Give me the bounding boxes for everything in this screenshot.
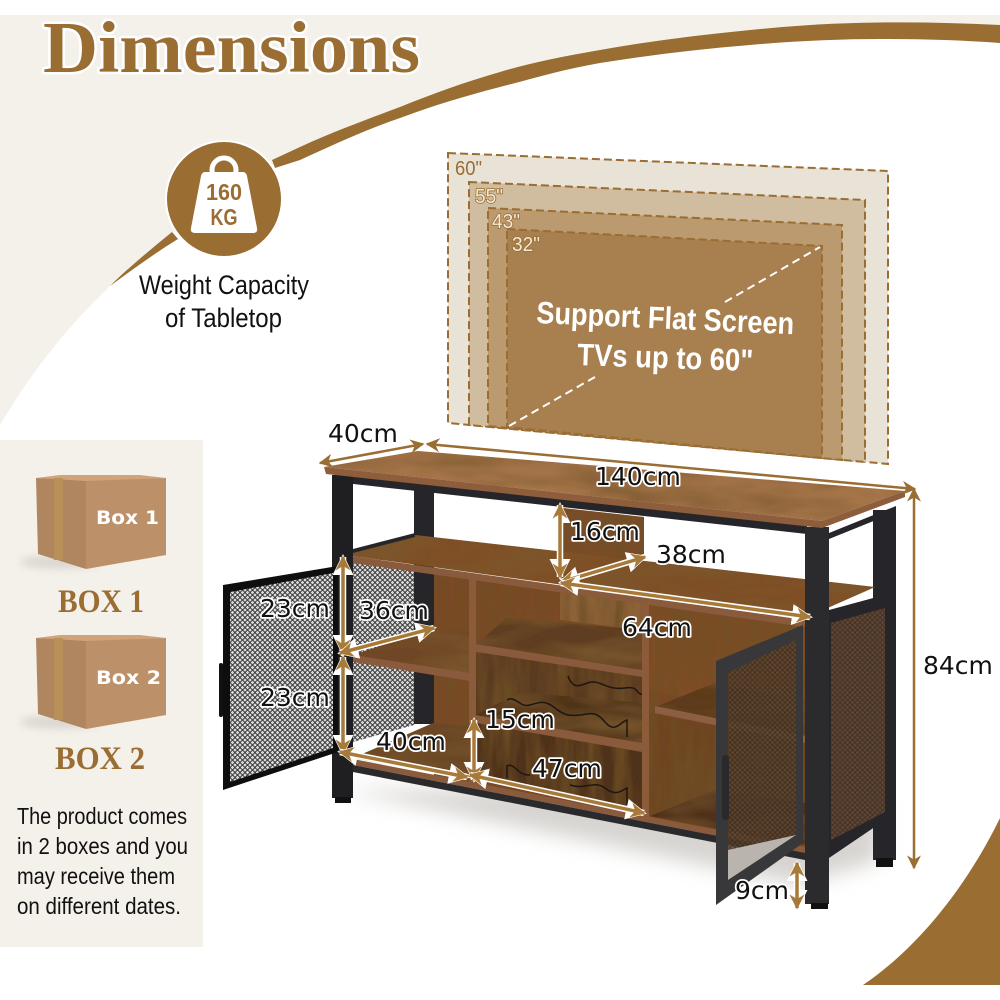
left door handle: [219, 663, 223, 717]
interior back wall: [434, 570, 805, 855]
left shelf: [353, 628, 470, 681]
55 inch screen: [469, 182, 865, 462]
title: Dimensions: [43, 7, 420, 88]
label: 140cm: 140cm: [595, 462, 681, 491]
back legs: [414, 484, 896, 867]
label: 9cm: 9cm: [735, 876, 789, 905]
text: shipping note: The product comes: [17, 803, 187, 829]
icon: box 1: Box 1: [96, 508, 159, 529]
TV support text: Support Flat Screen: [536, 295, 795, 341]
arrow: 64cm: [561, 583, 810, 617]
label: 84cm: 84cm: [923, 651, 993, 680]
wine racks: [507, 676, 642, 805]
left door: [219, 566, 338, 790]
arrow: 23cm upper: [340, 557, 346, 653]
tabletop: [324, 451, 905, 528]
arrow: 9cm: [794, 863, 800, 908]
screen diagonal: [509, 247, 820, 426]
right door handle: [722, 755, 729, 820]
open shelf: [345, 533, 875, 627]
text: weight capacity caption: Weight Capacity: [139, 270, 309, 300]
TV support text: TVs up to 60": [577, 337, 754, 378]
size labels: 55": [475, 186, 503, 208]
label: 40cm shelf: 40cm: [376, 727, 446, 756]
background: beige curved area: [0, 15, 1000, 425]
panel: boxes: [0, 440, 203, 947]
floor shadow: [340, 790, 880, 885]
text: shipping note: may receive them: [17, 863, 175, 889]
front right leg: [805, 527, 829, 909]
TV support text: [536, 295, 795, 378]
right compartment: [649, 602, 805, 845]
arrow: 36cm: [340, 628, 434, 653]
bottom shelf: [353, 723, 805, 860]
size labels: 32": [512, 234, 540, 256]
text: shipping note: [17, 803, 188, 919]
label: 36cm: 36cm: [359, 596, 429, 625]
label: 16cm: 16cm: [570, 517, 640, 546]
left compartment mesh end panel: [353, 560, 414, 742]
arrow: table width 140cm: [427, 444, 915, 489]
decorative corner swoosh: [863, 818, 1000, 985]
label: 23cm upper: 23cm: [260, 594, 330, 623]
icon: weight badge: [165, 140, 283, 258]
arrow: 40cm shelf: [340, 752, 467, 777]
43 inch screen: [488, 208, 842, 460]
label: BOX 1: BOX 1: [58, 584, 144, 620]
icon: box 2: Box 2: [96, 668, 161, 689]
back post: [563, 508, 644, 585]
size labels: [455, 158, 540, 256]
upper rail: [335, 473, 807, 534]
icon: weight shape: [191, 158, 257, 233]
middle shelves: [475, 618, 642, 816]
icon: weight shape: 160: [206, 179, 242, 205]
label: 40cm depth: 40cm: [328, 419, 398, 448]
lighter recess at rear of upper compartment: [560, 590, 642, 630]
label: 23cm lower: 23cm: [260, 683, 330, 712]
icon: weight shape: KG: [210, 204, 238, 230]
arrow: height 84cm: [913, 489, 915, 868]
label: 47cm: 47cm: [532, 754, 602, 783]
32 inch screen: [507, 229, 822, 458]
text: shipping note: in 2 boxes and you: [17, 833, 188, 859]
right side panel: [829, 594, 888, 858]
TV size stack: [448, 153, 888, 464]
dividers: [469, 576, 649, 818]
label: BOX 2: BOX 2: [55, 741, 145, 777]
brown swoosh curve: [110, 22, 1000, 286]
back rail: [829, 506, 896, 539]
text: shipping note: on different dates.: [17, 893, 181, 919]
60 inch screen: [448, 153, 888, 464]
text: weight capacity caption: of Tabletop: [165, 303, 282, 333]
size labels: 60": [455, 158, 482, 180]
arrow: table depth 40cm: [320, 444, 423, 463]
right door: [716, 625, 803, 905]
label: 15cm: 15cm: [485, 705, 555, 734]
icon: box 1: [20, 475, 166, 569]
size labels: 43": [492, 211, 520, 233]
arrow: 23cm lower: [340, 657, 346, 753]
label: 38cm: 38cm: [656, 540, 726, 569]
arrow: 15cm: [471, 720, 477, 780]
front left leg: [332, 475, 353, 803]
arrow: 16cm: [557, 505, 563, 577]
text: weight capacity caption: [139, 270, 309, 333]
label: 64cm: 64cm: [622, 613, 692, 642]
arrow: 47cm: [470, 775, 644, 813]
arrow: 38cm: [561, 557, 645, 582]
cabinet: [219, 451, 905, 909]
icon: box 2: [20, 635, 166, 729]
